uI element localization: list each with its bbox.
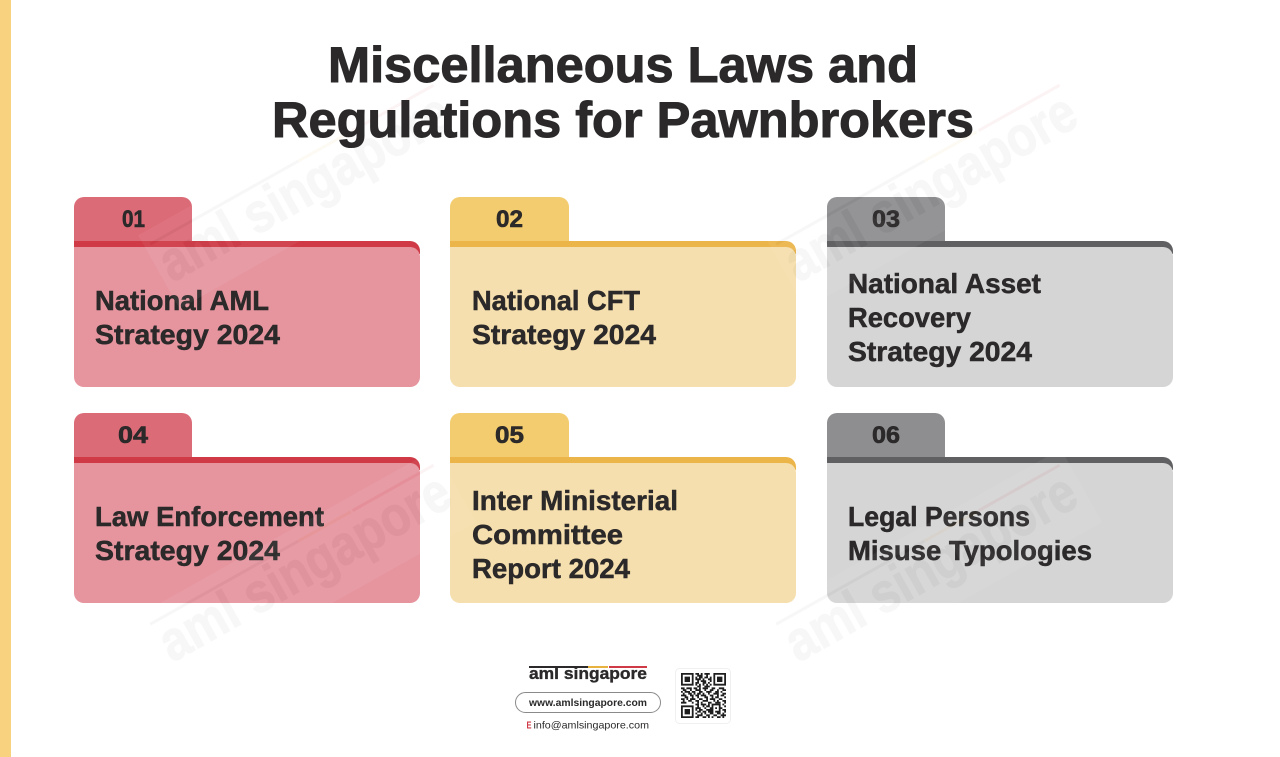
watermark: top right: aml singapore xyxy=(773,79,1087,293)
email line: info@amlsingapore.com xyxy=(534,720,649,732)
label 03: Recovery xyxy=(848,302,972,333)
footer logo: aml singapore xyxy=(529,664,647,683)
label 02 xyxy=(472,285,657,350)
number 05: 05 xyxy=(495,422,524,449)
label 05: Committee xyxy=(472,519,623,550)
QR code xyxy=(676,668,730,724)
label 06: Misuse Typologies xyxy=(848,535,1092,566)
tab 01 xyxy=(74,197,192,245)
card 04 xyxy=(74,413,420,603)
number 04: 04 xyxy=(118,422,149,449)
folder body 02 xyxy=(450,247,796,387)
number 01: 01 xyxy=(122,206,145,233)
folder bar 05 xyxy=(450,457,796,470)
label 04: Law Enforcement xyxy=(95,501,324,532)
folder body 03 xyxy=(827,247,1173,387)
left accent strip xyxy=(0,0,11,757)
website pill: www.amlsingapore.com xyxy=(528,697,647,709)
folder bar 06 xyxy=(827,457,1173,470)
card 05 xyxy=(450,413,796,603)
folder bar 01 xyxy=(74,241,420,254)
label 05 xyxy=(472,485,678,584)
email line: E xyxy=(526,720,532,732)
label 04 xyxy=(95,501,324,566)
folder bar 04 xyxy=(74,457,420,470)
website pill xyxy=(516,692,660,712)
watermark: top left: aml singapore xyxy=(147,79,461,293)
title xyxy=(272,37,974,148)
label 04: Strategy 2024 xyxy=(95,535,281,566)
number 03: 03 xyxy=(872,206,900,233)
tab 02 xyxy=(450,197,569,245)
card 06 xyxy=(827,413,1173,603)
title: Miscellaneous Laws and xyxy=(328,37,918,93)
label 01: National AML xyxy=(95,285,269,316)
label 01: Strategy 2024 xyxy=(95,319,281,350)
tab 04 xyxy=(74,413,192,461)
label 06 xyxy=(848,501,1092,566)
title: Regulations for Pawnbrokers xyxy=(272,92,974,148)
watermark: bottom left: aml singapore xyxy=(147,459,461,673)
folder bar 03 xyxy=(827,241,1173,254)
folder body 01 xyxy=(74,247,420,387)
label 03 xyxy=(848,268,1041,367)
card 02 xyxy=(450,197,796,387)
tab 05 xyxy=(450,413,569,461)
label 03: Strategy 2024 xyxy=(848,336,1033,367)
tab 03 xyxy=(827,197,945,245)
folder body 06 xyxy=(827,463,1173,603)
folder body 05 xyxy=(450,463,796,603)
label 05: Report 2024 xyxy=(472,553,631,584)
label 02: National CFT xyxy=(472,285,640,316)
number 02: 02 xyxy=(496,206,523,233)
card 03 xyxy=(827,197,1173,387)
card 01 xyxy=(74,197,420,387)
label 05: Inter Ministerial xyxy=(472,485,678,516)
number 06: 06 xyxy=(872,422,900,449)
tab 06 xyxy=(827,413,945,461)
folder bar 02 xyxy=(450,241,796,254)
label 03: National Asset xyxy=(848,268,1041,299)
label 06: Legal Persons xyxy=(848,501,1030,532)
label 01 xyxy=(95,285,281,350)
label 02: Strategy 2024 xyxy=(472,319,657,350)
watermark: bottom right: aml singapore xyxy=(773,459,1087,673)
folder body 04 xyxy=(74,463,420,603)
